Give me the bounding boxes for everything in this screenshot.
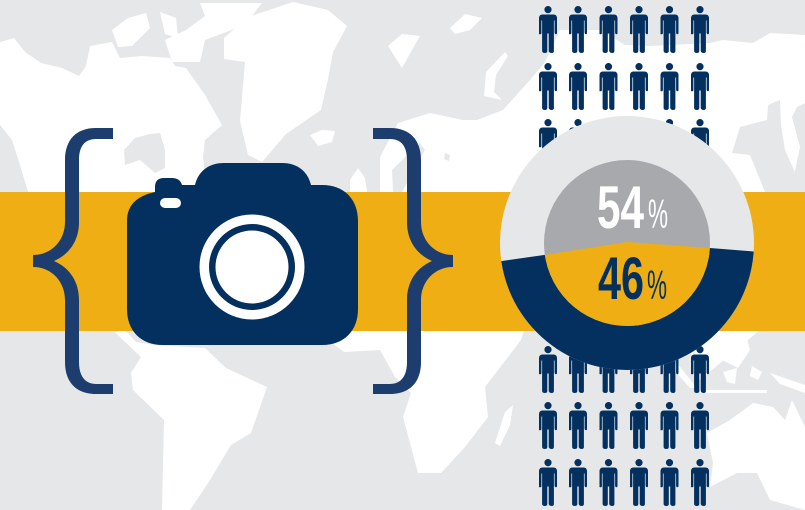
donut chart: 54% / 46% <box>495 116 760 380</box>
label: 46%: % <box>647 262 667 308</box>
label: 54%: 54 <box>597 174 644 241</box>
people grid: bottom rows <box>539 346 709 506</box>
people grid: top rows <box>539 6 709 166</box>
right curly brace <box>373 128 453 394</box>
label: 46%: 46 <box>598 245 644 312</box>
icon: camera <box>127 163 358 345</box>
label: 54%: % <box>648 191 668 237</box>
gold band <box>0 192 805 331</box>
left curly brace <box>33 128 113 394</box>
